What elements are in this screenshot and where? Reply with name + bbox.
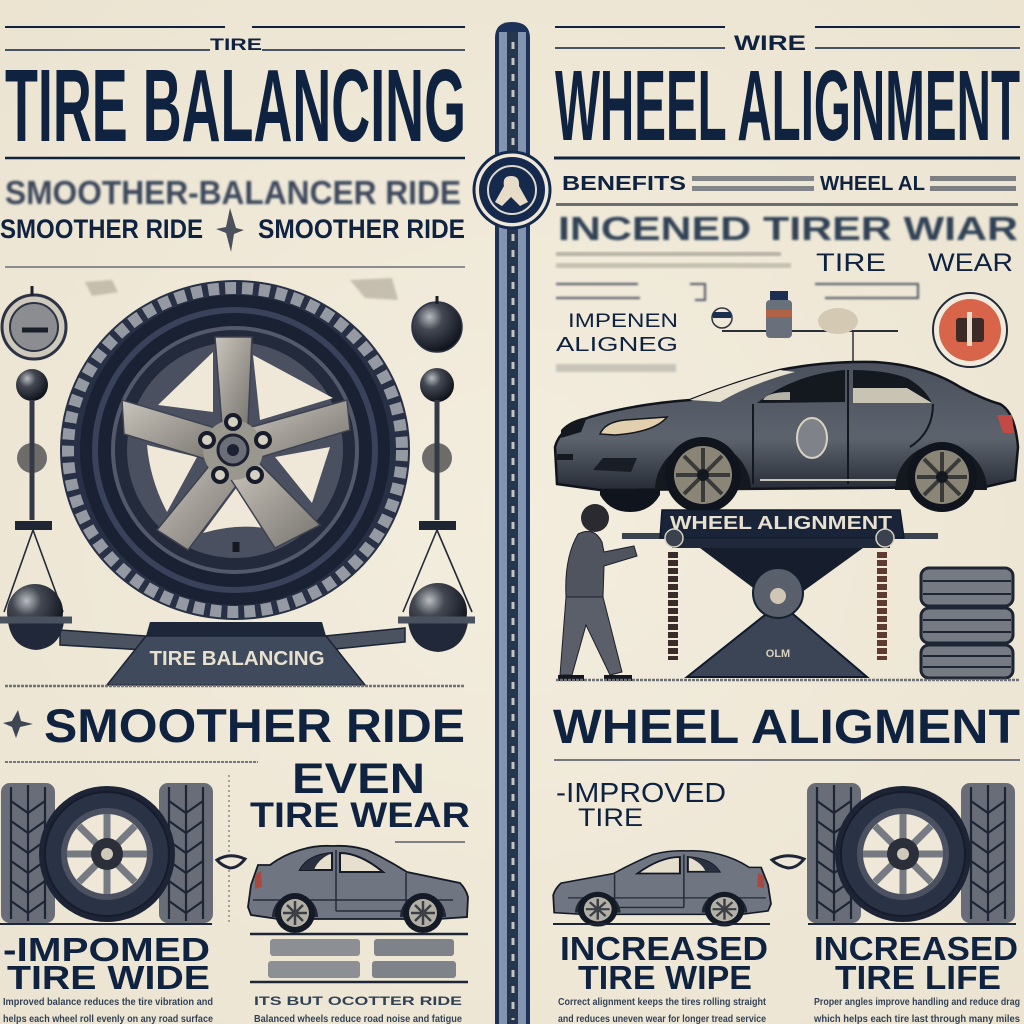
right panel: fine print: Correct alignment keeps the tires rolling straight	[558, 997, 767, 1008]
left panel: even tire wear text: TIRE WEAR	[250, 796, 470, 835]
left panel: even tire wear text	[250, 755, 470, 842]
right panel: increased tire wear text: INCENED TIRER WIAR	[558, 210, 1018, 247]
wheel openings	[147, 352, 333, 533]
left panel: tire stack strip	[250, 934, 468, 982]
right panel: improved aligned text: IMPENEN	[568, 311, 678, 332]
right panel: increased tire life text: INCREASED	[814, 930, 1018, 967]
center divider column	[474, 22, 550, 1024]
left panel: small tire illustration	[0, 783, 213, 924]
lift base	[687, 548, 867, 677]
lift base: OLM	[766, 648, 790, 660]
center emblem	[474, 152, 550, 228]
left panel: improved tire wide text: TIRE WIDE	[7, 959, 210, 996]
right panel: increased tire wipe text: TIRE WIPE	[578, 959, 752, 996]
balance base	[60, 622, 405, 685]
left ground line	[5, 685, 465, 687]
right panel: increased tire wear text	[556, 210, 1018, 277]
left panel: tire balancing heading: TIRE BALANCING	[5, 48, 466, 163]
left panel: smoother ride subheading: SMOOTHER RIDE	[258, 214, 465, 244]
right panel: increased tire wear text: WEAR	[928, 249, 1013, 277]
wheel spokes	[122, 337, 350, 550]
right panel: increased tire wipe text	[560, 930, 768, 996]
suspension springs	[673, 552, 882, 660]
left panel: improved tire wide text: -IMPOMED	[3, 931, 210, 968]
left panel: smoother ride subheading: SMOOTHER RIDE	[0, 214, 203, 244]
left panel: small car	[217, 775, 468, 933]
right panel: lift	[622, 510, 938, 677]
right panel: alignment diagram	[556, 284, 918, 362]
right panel: increased tire wipe text: INCREASED	[560, 930, 768, 967]
left panel: fine print: Improved balance reduces the tire vibration and	[3, 997, 213, 1008]
left panel: tire balancing heading	[5, 27, 466, 163]
right panel: increased tire life text: TIRE LIFE	[835, 959, 1001, 996]
right panel: improved aligned text	[556, 311, 678, 372]
left panel: tire balancing heading: TIRE	[210, 35, 262, 54]
right panel: increased tire wear text: TIRE	[816, 249, 886, 277]
lift arm: WHEEL ALIGNMENT	[670, 513, 892, 533]
left panel: smoother ride subheading: SMOOTHER-BALANCER RIDE	[5, 174, 461, 211]
balance base: TIRE BALANCING	[150, 648, 324, 670]
left panel: smoother ride subheading	[0, 174, 465, 267]
right panel: mechanic figure	[558, 504, 637, 681]
right panel: wheel alignment heading: WIRE	[734, 32, 806, 55]
left panel: large tire on balance	[0, 278, 475, 685]
right panel: wheel alignment banner: WHEEL ALIGMENT	[553, 701, 1020, 754]
right panel: benefits row: BENEFITS	[562, 173, 686, 195]
right panel: large car on lift	[555, 362, 1018, 513]
lift arm	[622, 510, 938, 548]
right panel: tire stack	[921, 568, 1013, 678]
right panel: improved tire text: -IMPROVED	[556, 777, 726, 808]
right panel: improved aligned text: ALIGNEG	[556, 334, 678, 356]
right panel: improved tire text	[556, 777, 726, 832]
right panel: improved tire text: TIRE	[578, 804, 643, 832]
left panel: fine print	[3, 994, 462, 1024]
left panel: smoother ride banner: SMOOTHER RIDE	[44, 699, 465, 752]
right panel: small tire illustration	[807, 783, 1016, 924]
left balance weights	[0, 286, 72, 650]
right panel: red badge	[933, 293, 1007, 367]
left panel: improved tire wide text	[3, 931, 210, 996]
right panel: benefits row: WHEEL AL	[820, 173, 925, 195]
right balance weights	[398, 296, 475, 652]
wheel hub	[200, 415, 270, 482]
left panel: even tire wear text: EVEN	[292, 755, 425, 803]
right panel: increased tire life text	[814, 930, 1018, 996]
right panel: fine print	[558, 997, 1020, 1024]
right panel: small car	[553, 851, 804, 927]
left panel: fine print: ITS BUT OCOTTER RIDE	[254, 994, 462, 1008]
right panel: benefits row	[556, 173, 1018, 206]
right ground line	[556, 679, 1020, 681]
tire tread and wheel	[60, 280, 410, 620]
